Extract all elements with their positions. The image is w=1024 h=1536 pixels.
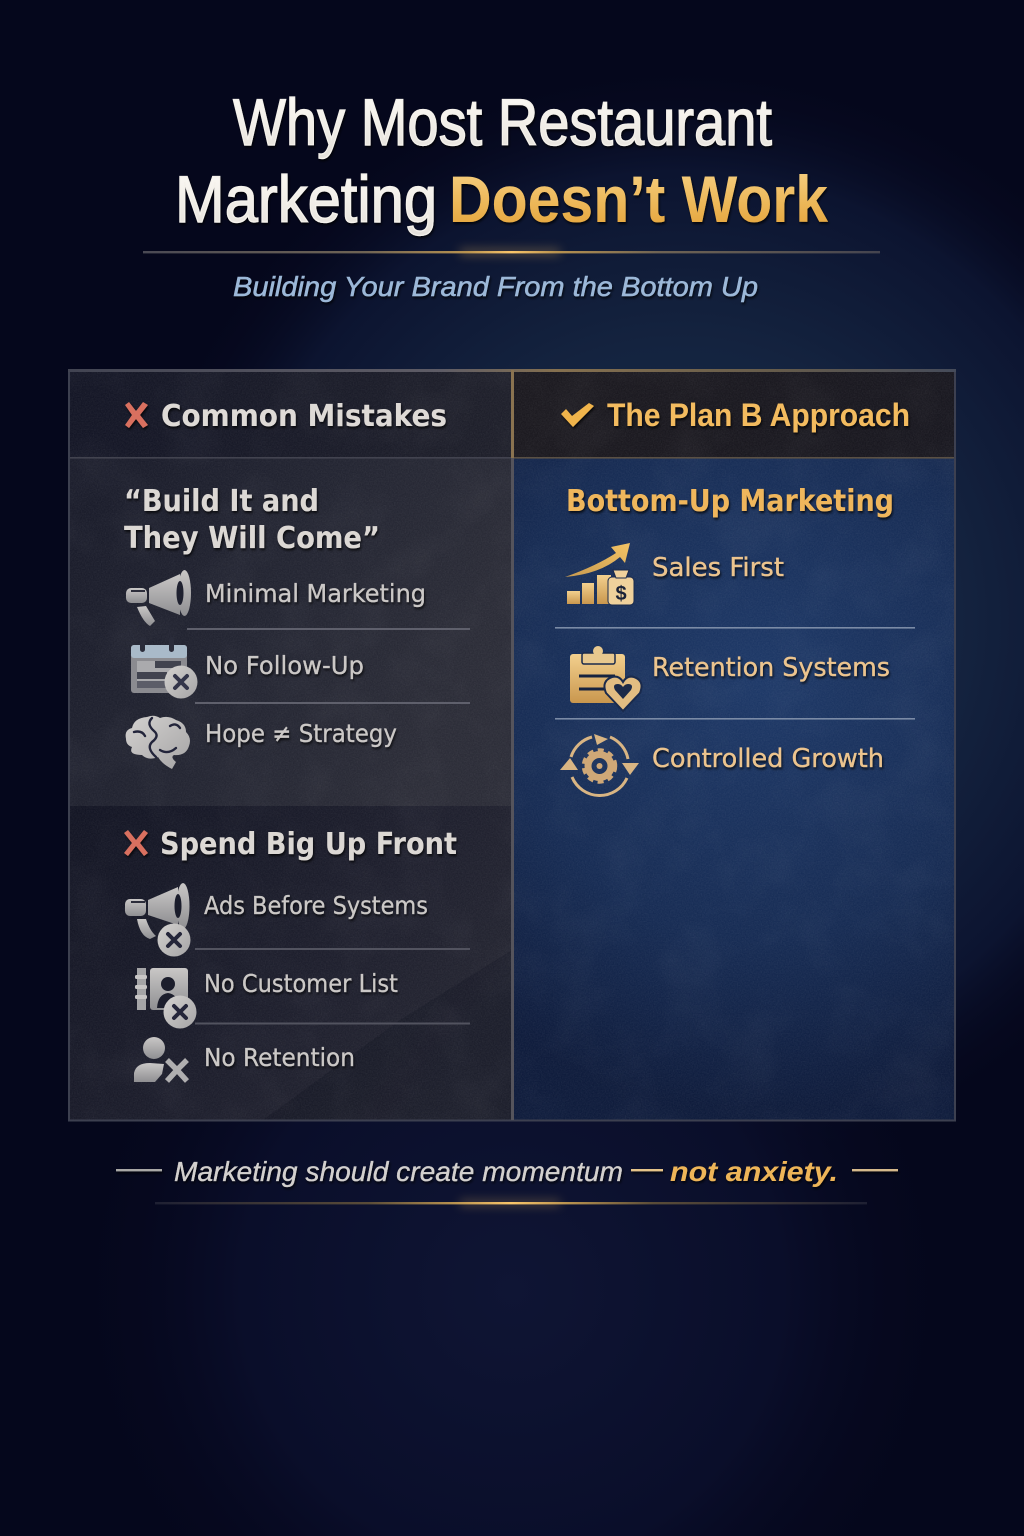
label: No Retention bbox=[204, 1043, 355, 1072]
row: retention systems bbox=[570, 646, 890, 711]
icon: clipboard with heart bbox=[570, 646, 642, 711]
icon: calendar with x bbox=[131, 637, 198, 698]
icon: red x bbox=[125, 402, 148, 428]
icon: gear cycle bbox=[560, 734, 639, 796]
label: Minimal Marketing bbox=[205, 579, 426, 608]
right header bbox=[561, 397, 910, 433]
footer rule bbox=[155, 1200, 867, 1206]
footer tagline: not anxiety. bbox=[670, 1156, 838, 1187]
panel: common mistakes background bbox=[70, 371, 512, 1120]
heading: common mistakes: Common Mistakes bbox=[161, 399, 447, 434]
left header bbox=[125, 399, 447, 434]
icon: gold check bbox=[561, 403, 594, 427]
label: Controlled Growth bbox=[652, 744, 884, 774]
label: Ads Before Systems bbox=[204, 891, 428, 920]
icon: megaphone with x bbox=[125, 883, 190, 956]
section heading: build it and they will come: They Will Come” bbox=[124, 521, 380, 556]
icon: growth bars and money bag bbox=[565, 543, 634, 605]
row: minimal marketing bbox=[126, 570, 426, 626]
panel: comparison table bbox=[68, 369, 956, 1121]
frame bbox=[68, 369, 956, 1120]
label: Hope ≠ Strategy bbox=[205, 719, 397, 748]
footer tagline bbox=[116, 1156, 898, 1187]
title rule bbox=[143, 249, 880, 255]
label: Retention Systems bbox=[652, 653, 890, 683]
icon: growth bars and money bag: $ bbox=[615, 583, 627, 605]
panel: plan b background bbox=[514, 371, 954, 1120]
label: Sales First bbox=[652, 553, 784, 583]
title: Doesn’t Work bbox=[449, 162, 828, 236]
label: No Customer List bbox=[204, 969, 398, 998]
row: no follow-up bbox=[131, 637, 364, 698]
icon: red x bbox=[124, 830, 148, 856]
row: sales first bbox=[565, 543, 784, 605]
title bbox=[175, 85, 828, 236]
footer tagline: Marketing should create momentum bbox=[174, 1156, 623, 1187]
section heading: build it and they will come bbox=[124, 484, 380, 556]
heading: plan b approach: The Plan B Approach bbox=[607, 397, 910, 433]
row: ads before systems bbox=[125, 883, 428, 956]
row: no retention bbox=[134, 1037, 355, 1082]
icon: contact book with x bbox=[135, 968, 196, 1028]
subtitle: Building Your Brand From the Bottom Up bbox=[233, 271, 758, 302]
row: controlled growth bbox=[560, 734, 884, 796]
title: Why Most Restaurant bbox=[233, 85, 772, 159]
section heading: build it and they will come: “Build It and bbox=[124, 484, 319, 519]
label: No Follow-Up bbox=[205, 651, 364, 680]
icon: megaphone bbox=[126, 570, 191, 626]
section heading: spend big up front bbox=[124, 827, 457, 862]
title: Marketing bbox=[175, 162, 437, 236]
heading: Spend Big Up Front bbox=[160, 827, 457, 862]
row: no customer list bbox=[135, 968, 398, 1028]
icon: person with x bbox=[134, 1037, 187, 1082]
texture bbox=[68, 369, 956, 1121]
row: hope is not strategy bbox=[126, 716, 397, 769]
icon: brain bbox=[126, 716, 190, 769]
heading: bottom-up marketing: Bottom-Up Marketing bbox=[566, 484, 894, 519]
